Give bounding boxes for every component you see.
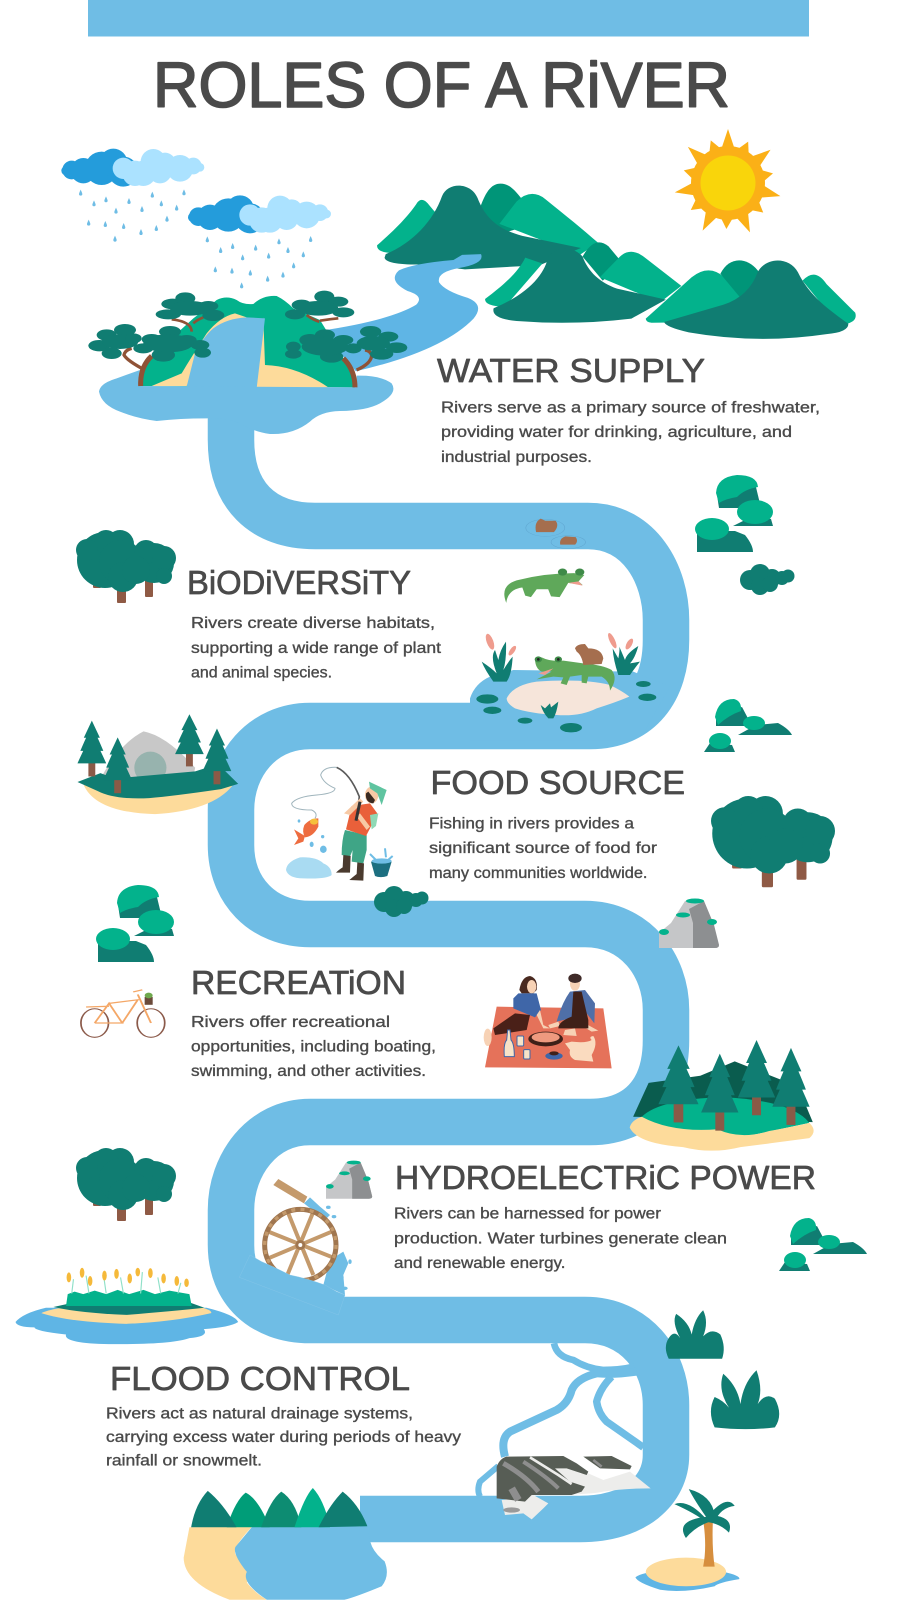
text: water supply: Rivers serve as a primary source of freshwater,: [441, 400, 820, 416]
foliage: [88, 291, 407, 363]
icon: bicycle: [81, 990, 165, 1037]
rock on river bend: [659, 898, 719, 948]
text: biodiversity: and animal species.: [191, 664, 332, 682]
lily pads: [476, 681, 656, 732]
cat: [565, 1036, 595, 1062]
heading: biodiversity: BiODiVERSiTY: [187, 564, 411, 601]
small plant: [541, 702, 558, 718]
capybara: [575, 644, 603, 665]
river delta and rock: [478, 1343, 651, 1519]
water patch: [239, 1255, 345, 1315]
bottle and cups: [504, 1030, 530, 1059]
spokes: [268, 1213, 335, 1275]
dog dish: [545, 1051, 563, 1060]
lake: [99, 370, 393, 434]
crocodile: [535, 656, 615, 691]
upper stream: [321, 254, 482, 371]
bushes: top right: [695, 475, 773, 552]
sand left: [152, 313, 247, 386]
top banner: [88, 0, 809, 36]
woman: [484, 976, 550, 1046]
text: recreation: Rivers offer recreational: [191, 1014, 390, 1031]
heading: hydroelectric power: HYDROELECTRiC POWER: [395, 1159, 816, 1196]
river: [231, 415, 666, 1519]
man: [336, 782, 387, 881]
rod: [337, 767, 359, 821]
reed island: [15, 1268, 238, 1344]
trees: left of biodiversity: [76, 530, 176, 603]
dark rock: [497, 1456, 632, 1502]
bushes: left of recreation: [96, 885, 174, 962]
text: flood control: carrying excess water during periods of heavy: [106, 1429, 461, 1446]
text: recreation: opportunities, including boating,: [191, 1038, 436, 1056]
trunks: [124, 315, 372, 387]
wheel ring: [265, 1209, 336, 1281]
text: water supply: industrial purposes.: [441, 449, 592, 466]
sand right: [255, 317, 328, 387]
sand island: [507, 681, 629, 715]
green hill: [138, 296, 355, 387]
text: water supply: [441, 400, 820, 466]
text: food source: many communities worldwide.: [429, 865, 648, 882]
bush: blob right: [740, 564, 794, 595]
trees: left of hydro: [76, 1148, 176, 1221]
bushes: right of food source: [704, 699, 792, 752]
bucket: [370, 848, 393, 877]
snow: [502, 1457, 651, 1519]
man: [548, 974, 598, 1036]
waterfall: [187, 317, 265, 388]
text: water supply: providing water for drinking, agriculture, and: [441, 424, 792, 441]
clouds and rain: [61, 149, 331, 288]
food plate: [528, 1032, 563, 1046]
text: food source: [429, 816, 657, 882]
heading: food source: FOOD SOURCE: [430, 764, 685, 801]
trees: right of food source: [711, 796, 835, 887]
rivulets: [478, 1343, 643, 1497]
lake and waterfall with trees: [88, 291, 407, 434]
icon: alligator: [504, 569, 584, 603]
bush: blob on river: [374, 886, 428, 917]
text: hydroelectric power: [394, 1206, 727, 1272]
fishing line: [292, 767, 337, 818]
text: flood control: rainfall or snowmelt.: [106, 1452, 262, 1470]
text: flood control: [106, 1406, 461, 1470]
plants: right of delta: [666, 1310, 779, 1429]
text: recreation: [191, 1014, 436, 1080]
heading: water supply: WATER SUPPLY: [437, 352, 705, 389]
pond: [470, 670, 670, 741]
title: ROLES OF A RiVER: [153, 49, 730, 121]
text: hydroelectric power: and renewable energy.: [394, 1255, 566, 1272]
island with crocodile and capybara: [470, 632, 670, 741]
icon: picnic: [484, 974, 612, 1068]
palm island: [635, 1489, 739, 1591]
forest island with cave: [77, 714, 238, 814]
icon: fisherman: [286, 767, 393, 881]
mountains: [377, 184, 856, 339]
icon: waterwheel: [239, 1179, 352, 1315]
text: flood control: Rivers act as natural drainage systems,: [106, 1406, 413, 1422]
icon: sun: [674, 129, 782, 235]
reeds left: [482, 633, 517, 682]
blanket: [485, 1007, 612, 1068]
text: biodiversity: Rivers create diverse habitats,: [191, 615, 435, 632]
splash drops: [298, 819, 327, 853]
text: biodiversity: [191, 615, 442, 682]
chute: [273, 1179, 307, 1203]
text: biodiversity: supporting a wide range of plant: [191, 640, 442, 657]
forest island: [630, 1040, 814, 1151]
fish: [294, 818, 318, 845]
text: hydroelectric power: Rivers can be harnessed for power: [394, 1206, 661, 1222]
bushes: right of hydro: [779, 1218, 867, 1271]
rock streaks: [503, 1460, 602, 1500]
text: hydroelectric power: production. Water turbines generate clean: [394, 1230, 727, 1248]
rock above waterwheel: [326, 1161, 372, 1199]
icon: capybaras in water: [526, 519, 585, 549]
drops: [326, 1206, 352, 1290]
reeds right: [606, 632, 640, 675]
text: food source: significant source of food for: [429, 840, 657, 857]
heading: flood control: FLOOD CONTROL: [110, 1360, 410, 1397]
text: recreation: swimming, and other activities.: [191, 1063, 426, 1080]
heading: recreation: RECREATiON: [191, 964, 406, 1001]
puddle: [286, 857, 332, 879]
estuary: hills, sand and lake: [184, 1488, 387, 1600]
text: food source: Fishing in rivers provides a: [429, 816, 634, 832]
falling water: [304, 1197, 330, 1220]
